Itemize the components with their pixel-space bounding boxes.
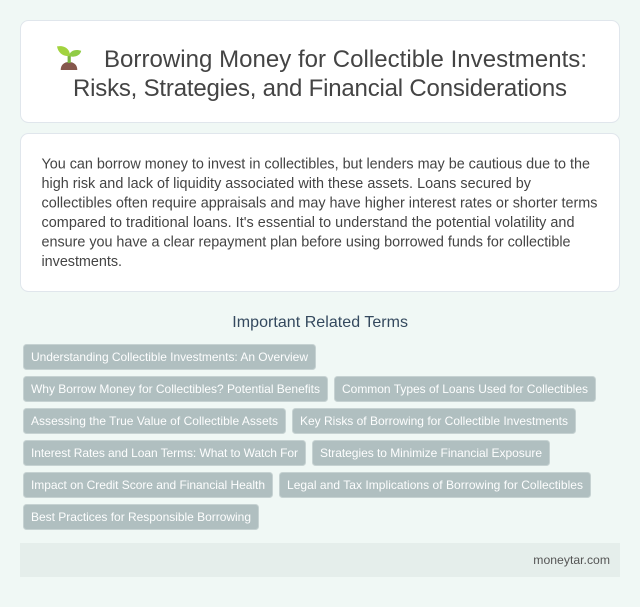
tag 8: Impact on Credit Score and Financial Health: [31, 478, 265, 492]
footer: moneytar.com: [533, 553, 610, 567]
text block: summary: high risk and lack of liquidity associated with these assets. Loans secured by: [42, 176, 532, 192]
tag 2: [24, 376, 328, 402]
tag 10: [24, 504, 258, 530]
panel: summary card: [20, 134, 620, 292]
text block: summary: ensure you have a clear repayment plan before using borrowed funds for collectible: [42, 234, 570, 250]
tag 4: Assessing the True Value of Collectible Assets: [31, 414, 278, 428]
text block: summary: [42, 156, 598, 270]
heading: related terms: Important Related Terms: [232, 314, 408, 331]
tag 3: [334, 376, 596, 402]
tag 5: Key Risks of Borrowing for Collectible Investments: [300, 414, 568, 428]
tag 7: [312, 440, 550, 466]
footer: [20, 543, 620, 577]
tag 9: [280, 472, 590, 498]
tag 3: Common Types of Loans Used for Collectibles: [342, 382, 588, 396]
tag 10: Best Practices for Responsible Borrowing: [31, 510, 251, 524]
tag 4: [24, 408, 286, 434]
panel: title card: [20, 20, 620, 122]
title: Borrowing Money for Collectible Investments:: [104, 46, 587, 73]
tag 1: [24, 344, 316, 370]
text block: summary: investments.: [42, 254, 122, 270]
tag 7: Strategies to Minimize Financial Exposure: [320, 446, 542, 460]
panel: related term tags: [24, 344, 596, 530]
text block: summary: collectibles often require appraisals and may have higher interest rates or shorter terms: [42, 195, 598, 211]
tag 9: Legal and Tax Implications of Borrowing for Collectibles: [287, 478, 583, 492]
tag 6: [24, 440, 306, 466]
icon: sprout: [57, 46, 81, 70]
tag 5: [292, 408, 576, 434]
title: Risks, Strategies, and Financial Considerations: [73, 75, 567, 102]
tag 1: Understanding Collectible Investments: An Overview: [31, 350, 308, 364]
tag 8: [24, 472, 272, 498]
tag 6: Interest Rates and Loan Terms: What to Watch For: [31, 446, 298, 460]
title: [73, 46, 587, 102]
text block: summary: You can borrow money to invest in collectibles, but lenders may be cautious due to the: [42, 156, 590, 172]
text block: summary: compared to traditional loans. It's essential to understand the potential volatility and: [42, 215, 574, 231]
tag 2: Why Borrow Money for Collectibles? Potential Benefits: [31, 382, 320, 396]
